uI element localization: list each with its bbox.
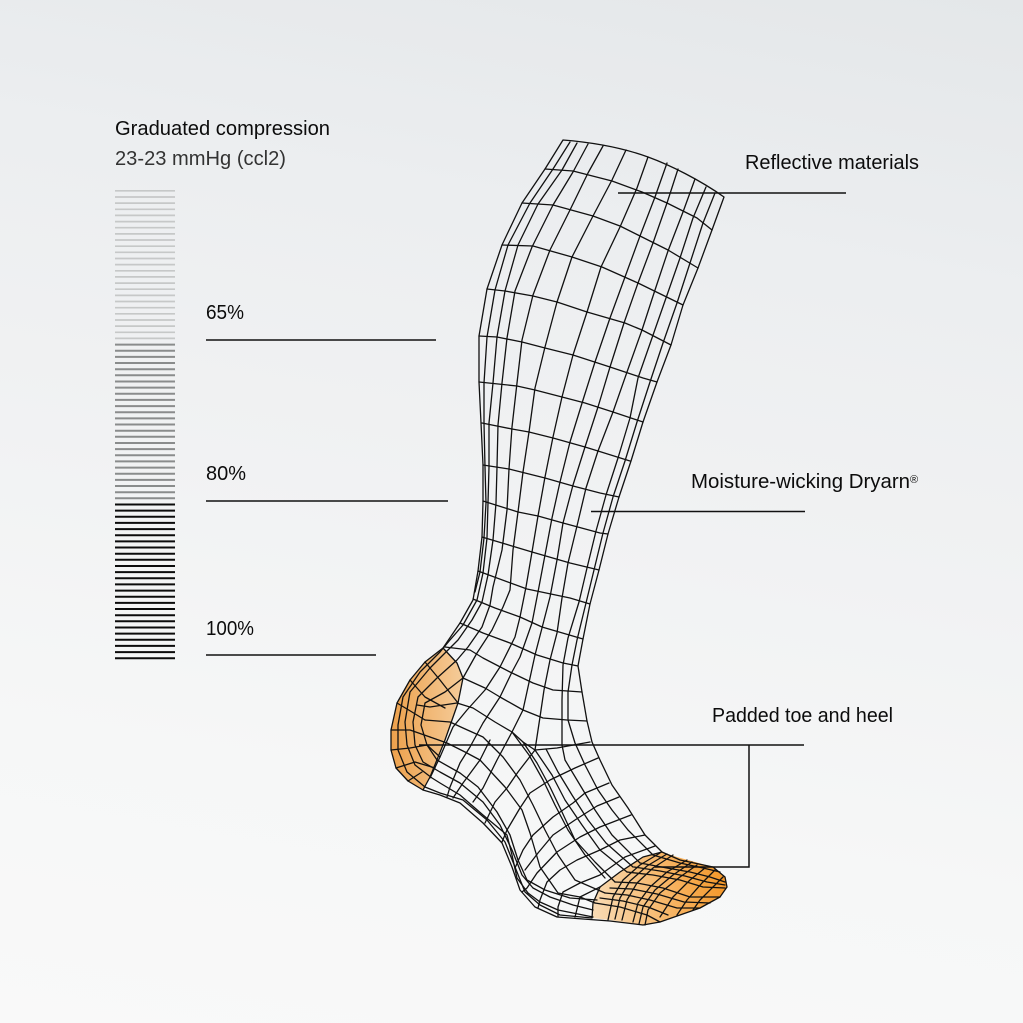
- callout: padded toe and heel: [419, 704, 893, 867]
- sock wireframe illustration: [391, 140, 727, 925]
- heel padding: [391, 648, 463, 790]
- compression gradient bar: [115, 191, 175, 658]
- callout: moisture-wicking dryarn: [591, 470, 918, 512]
- callout: moisture-wicking dryarn: Moisture-wicking Dryarn: [691, 470, 910, 493]
- callout: moisture-wicking dryarn: ®: [910, 474, 918, 486]
- mesh: leg and foot columns: [398, 142, 715, 918]
- label: 80%: 80%: [206, 462, 246, 485]
- mesh: toe lines: [592, 852, 725, 925]
- mesh: foot cross rows: [502, 758, 655, 917]
- mesh: leg rows: [417, 169, 712, 750]
- label: 65%: 65%: [206, 301, 244, 324]
- mesh: heel radial lines: [391, 648, 463, 790]
- toe padding: [592, 852, 727, 925]
- callout: reflective materials: Reflective materials: [745, 151, 919, 174]
- heading: graduated compression: 23-23 mmHg (ccl2): [115, 147, 286, 170]
- heading: graduated compression: [115, 117, 330, 170]
- callout: padded toe and heel: Padded toe and heel: [712, 704, 893, 727]
- label: 100%: 100%: [206, 617, 254, 640]
- heading: graduated compression: Graduated compression: [115, 117, 330, 140]
- sock outline: [391, 140, 727, 925]
